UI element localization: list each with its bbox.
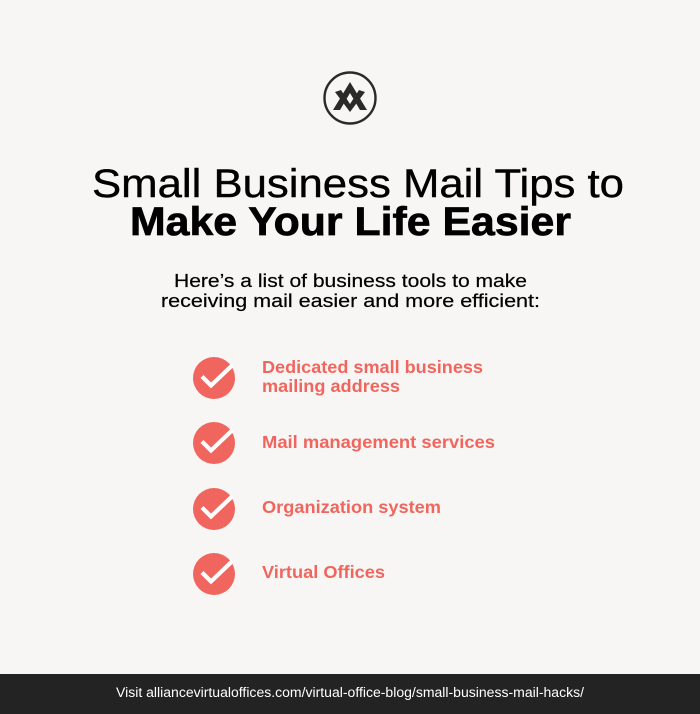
- item: mail management: [193, 422, 495, 464]
- title: [92, 162, 624, 244]
- item: organization system: Organization system: [262, 497, 441, 517]
- footer bar: Visit alliancevirtualoffices.com/virtual-office-blog/small-business-mail-hacks/: [116, 685, 584, 700]
- item: virtual offices: [193, 553, 385, 595]
- subtitle: Here’s a list of business tools to make: [174, 270, 527, 291]
- checklist: [193, 357, 495, 595]
- footer bar: [0, 674, 700, 714]
- item: dedicated address: [193, 357, 483, 399]
- item: organization system: [193, 488, 441, 530]
- item: dedicated address: Dedicated small business: [262, 357, 483, 377]
- title: Make Your Life Easier: [130, 200, 571, 244]
- icon: logo: [324, 72, 376, 124]
- title: Small Business Mail Tips to: [92, 162, 624, 206]
- item: mail management: Mail management services: [262, 432, 495, 452]
- subtitle: [161, 270, 540, 311]
- subtitle: receiving mail easier and more efficient:: [161, 290, 540, 311]
- item: virtual offices: Virtual Offices: [262, 562, 385, 582]
- item: dedicated address: mailing address: [262, 376, 400, 396]
